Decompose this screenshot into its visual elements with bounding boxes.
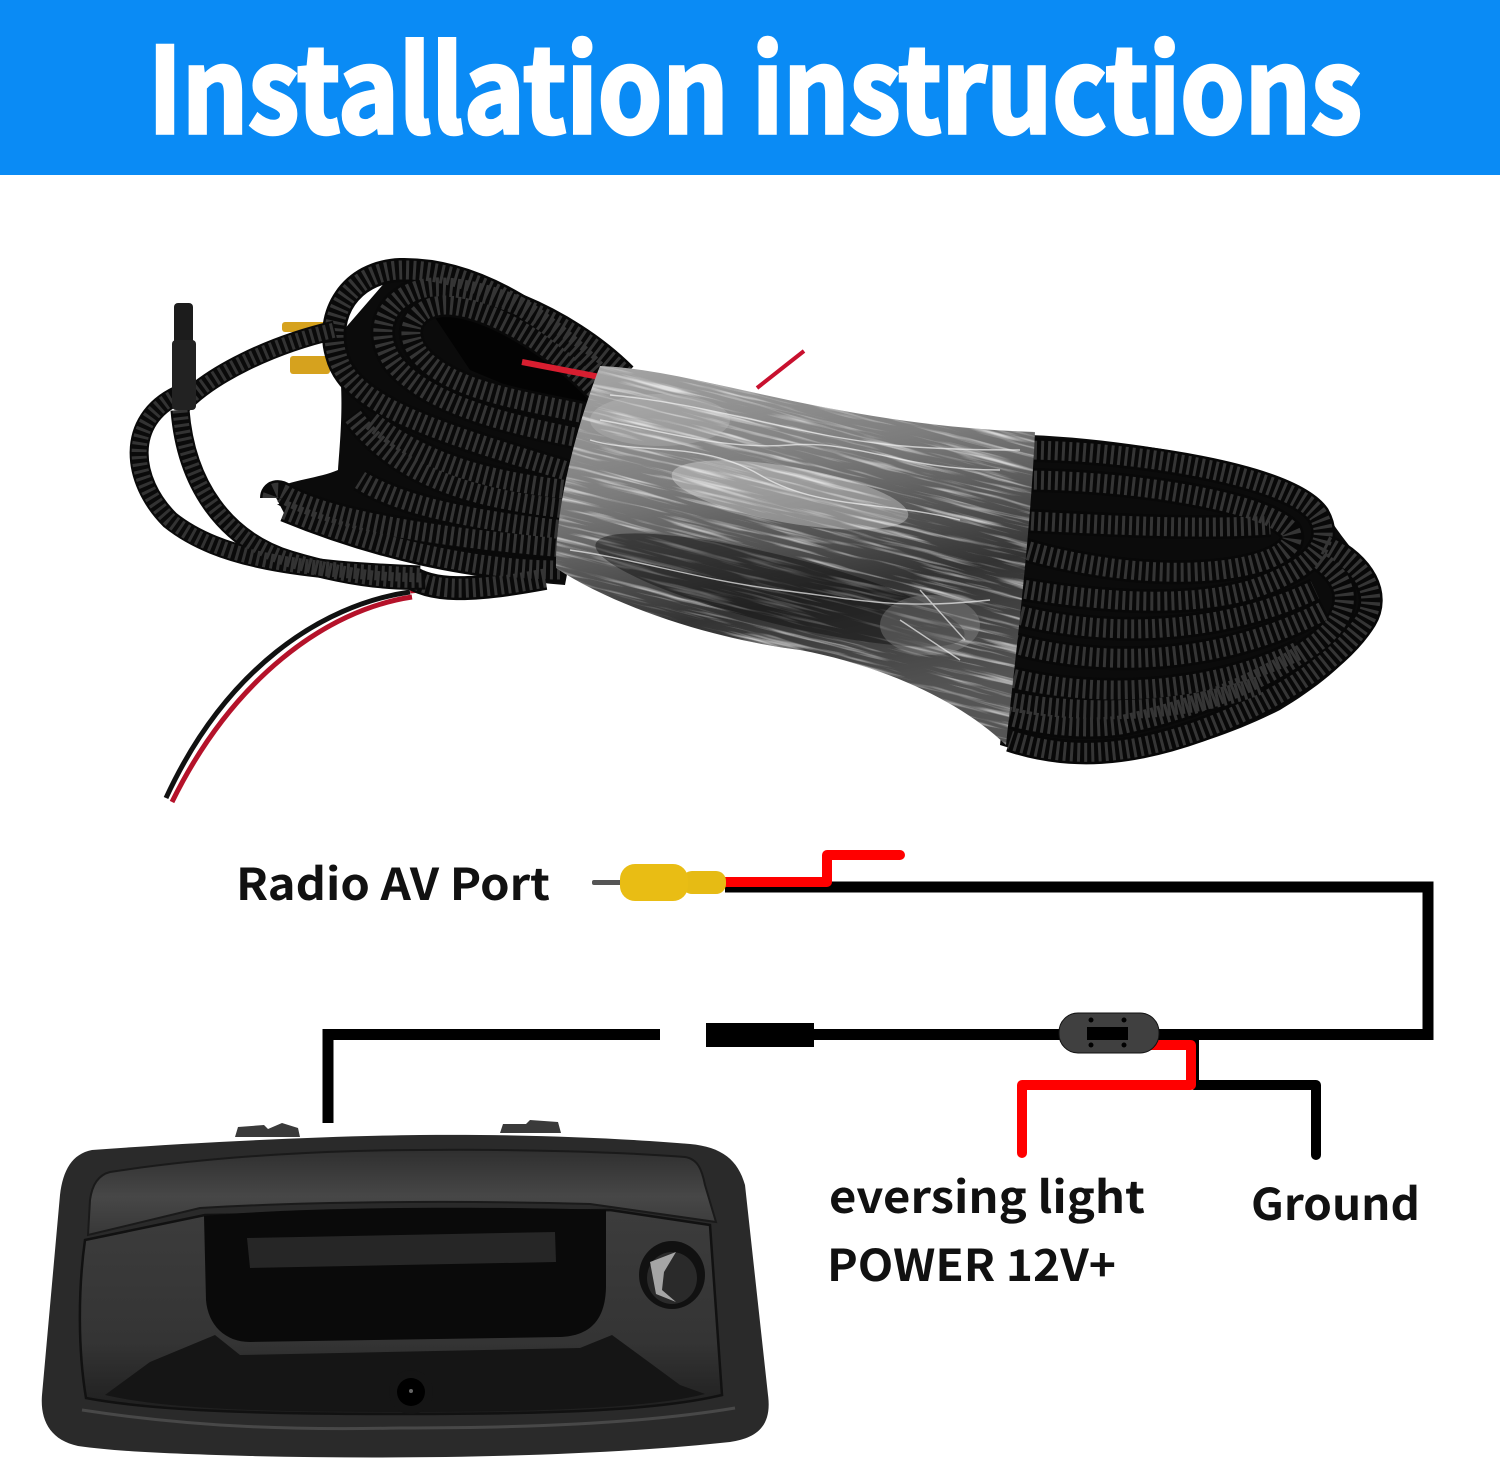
camera pigtail cable <box>139 330 425 580</box>
right cable strands <box>1000 450 1371 752</box>
red wire inside coil <box>522 362 605 378</box>
lower handle face <box>80 1210 722 1414</box>
photo: coiled camera extension cable <box>130 258 1383 804</box>
bezel edge highlight <box>82 1408 735 1429</box>
upper lid <box>88 1150 716 1235</box>
inline junction box <box>1059 1013 1159 1053</box>
label: ground: Ground <box>1251 1169 1420 1233</box>
lock cylinder hole <box>639 1241 705 1309</box>
mounting clips <box>235 1120 561 1137</box>
red and black power lead <box>166 575 560 802</box>
camera connector <box>706 1023 814 1047</box>
photo: tailgate handle camera <box>42 1120 769 1457</box>
wiring diagram <box>236 849 1428 1294</box>
left coil body <box>272 265 600 585</box>
video cable, RCA plug to switch <box>725 887 1428 1034</box>
red trigger wire at RCA plug <box>722 855 900 882</box>
label: reversing light: eversing light <box>829 1162 1145 1226</box>
label: power 12V+: POWER 12V+ <box>827 1230 1116 1294</box>
reversing camera lens <box>389 1370 433 1414</box>
RCA plug behind coil <box>282 322 330 374</box>
clear plastic wrap <box>556 366 1035 745</box>
left cable strands <box>272 270 625 588</box>
camera side cable <box>328 1034 660 1123</box>
handle recess <box>204 1208 606 1342</box>
recess inner pull <box>247 1232 556 1268</box>
title banner <box>0 0 1500 175</box>
handle outer bezel <box>42 1135 769 1457</box>
label: Radio AV Port: Radio AV Port <box>236 849 550 913</box>
right coil body <box>1000 435 1378 760</box>
camera plug connector <box>172 303 196 410</box>
RCA plug <box>592 864 726 901</box>
lower face shadow <box>105 1335 705 1412</box>
black ground wire <box>1194 1040 1316 1155</box>
red power wire <box>1022 1045 1191 1153</box>
red wire tip <box>757 351 804 388</box>
inner coil shadow <box>430 304 610 420</box>
